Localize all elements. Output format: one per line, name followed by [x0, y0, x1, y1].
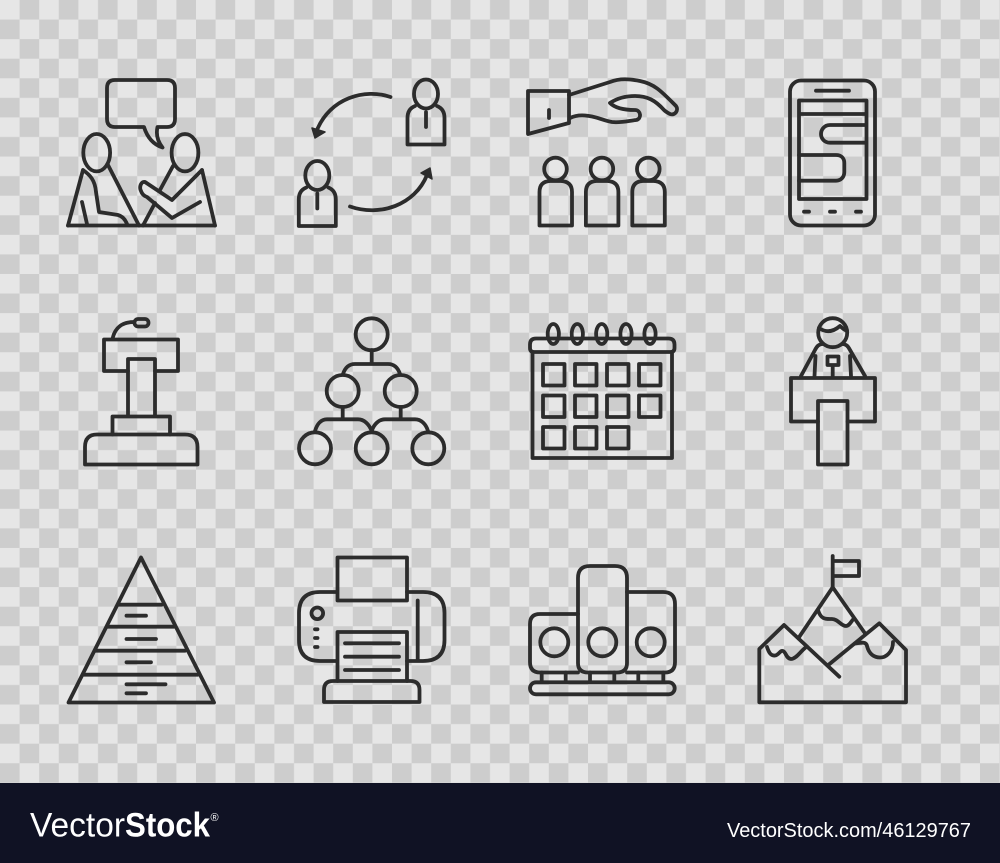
- speaker: [816, 89, 849, 93]
- tray: [324, 681, 420, 702]
- printer body: [299, 592, 444, 661]
- table line: [68, 224, 215, 227]
- base bar: [530, 682, 675, 694]
- icon: hierarchy chart: [299, 318, 444, 464]
- input paper: [338, 558, 407, 600]
- chat bubbles: [799, 125, 866, 181]
- header bar: [530, 338, 674, 352]
- head: [818, 318, 847, 347]
- medals: [540, 628, 568, 656]
- logo: VectorStock: Stock: [125, 806, 210, 844]
- legs: [542, 672, 663, 682]
- logo: VectorStock: ®: [210, 812, 219, 824]
- image id url: VectorStock.com/46129767: [727, 820, 971, 842]
- icon: mobile phone with chat: [790, 80, 875, 226]
- hand: [569, 79, 677, 122]
- text dashes: [126, 616, 166, 693]
- right person: [140, 134, 215, 226]
- flag: [833, 556, 859, 587]
- tier lines: [84, 605, 198, 675]
- icon: mountain peak with flag: [759, 556, 906, 702]
- base: [85, 434, 198, 464]
- left block: [530, 614, 578, 672]
- lectern top: [104, 340, 178, 371]
- phone body: [790, 80, 875, 226]
- screen: [799, 100, 866, 199]
- hair: [819, 326, 847, 331]
- person 3: [632, 158, 665, 226]
- centre peak: [798, 587, 865, 638]
- right block: [627, 592, 675, 672]
- arrow bottom: [350, 168, 432, 210]
- icon: award podium: [530, 566, 675, 694]
- icon: hand over three people: [528, 79, 677, 226]
- arrow top: [312, 94, 390, 138]
- connectors: [315, 350, 428, 431]
- binder rings: [548, 324, 656, 344]
- person bottom left: [299, 161, 336, 226]
- icon: speaker at lectern: [791, 318, 875, 464]
- snow caps: [767, 610, 893, 659]
- microphone: [828, 356, 838, 376]
- buttons: [804, 210, 861, 214]
- lectern: [791, 378, 875, 422]
- page: [532, 352, 672, 458]
- output paper: [338, 632, 407, 681]
- logo: VectorStock: Vector: [30, 806, 125, 844]
- icon: calendar: [530, 324, 674, 458]
- centre block: [578, 566, 627, 672]
- icon: pyramid diagram: [68, 558, 214, 702]
- cuff: [528, 91, 569, 134]
- icon: two people talking with speech bubble: [68, 80, 215, 226]
- logo: VectorStock: [30, 806, 219, 844]
- step: [112, 416, 170, 434]
- side mountains: [759, 623, 906, 702]
- icon: podium with microphone: [85, 319, 198, 464]
- footer bar: [0, 783, 1000, 863]
- icon: printer: [299, 558, 444, 702]
- controls: [312, 608, 323, 619]
- person 2: [586, 158, 618, 226]
- column: [128, 359, 155, 416]
- speech bubble: [107, 80, 175, 148]
- microphone: [134, 319, 148, 326]
- torso: [801, 344, 865, 376]
- person 1: [540, 158, 572, 226]
- left person: [68, 134, 139, 226]
- day squares: [543, 364, 660, 448]
- lectern column: [818, 401, 848, 464]
- person top right: [408, 80, 444, 144]
- icon: two people exchanging with circular arrows: [299, 80, 444, 226]
